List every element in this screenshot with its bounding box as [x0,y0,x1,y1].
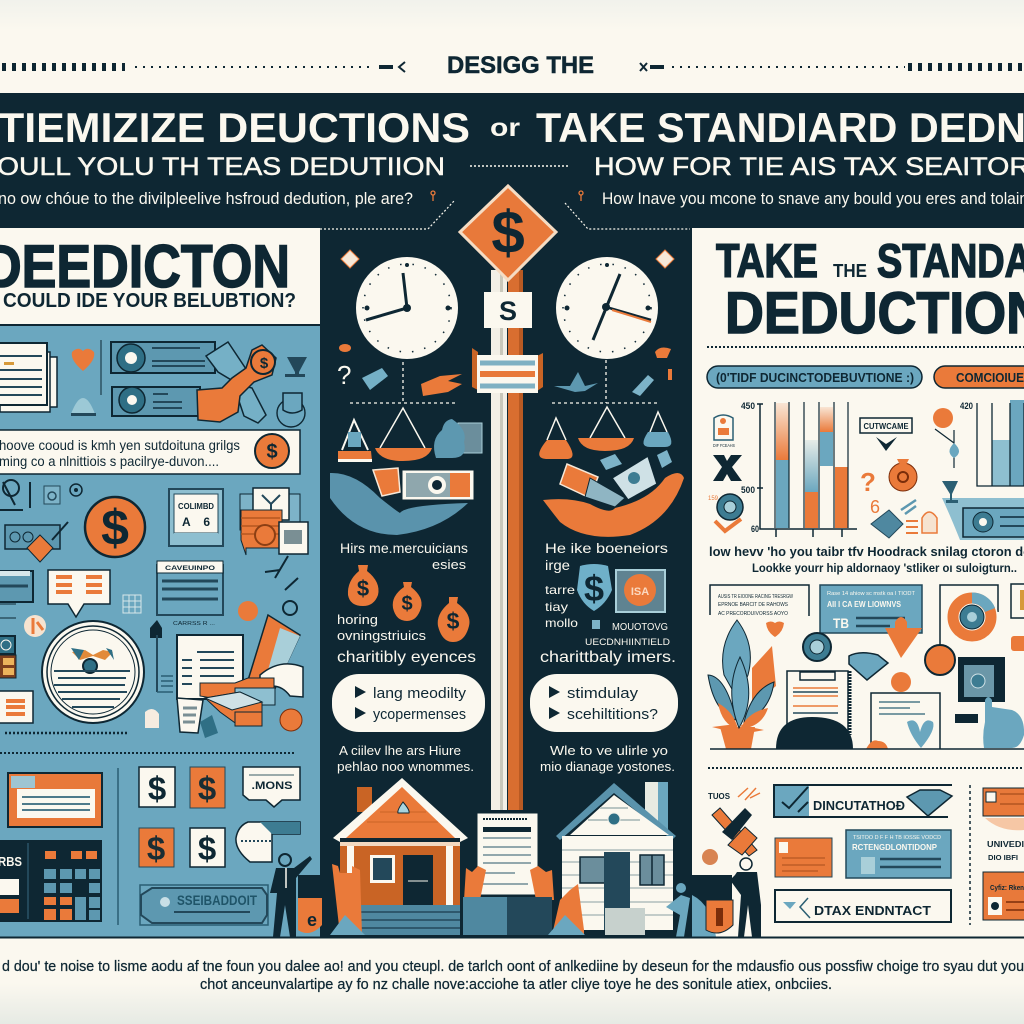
orange down arrow [885,617,922,658]
left bar chart [741,401,857,537]
note frame [710,585,809,617]
icon: large dollar coin [85,497,145,557]
right column text: tiay [545,600,568,614]
right list pill: stimdulay [567,685,639,702]
engraved badge [140,885,268,925]
right column text: charittbaly imers. [540,649,676,666]
left column text: Hirs me.mercuicians [340,540,468,556]
callout box: ming co a nlnittiois s pacilrye-duvon.... [0,453,219,469]
callout box: hoove cooud is kmh yen sutdoituna grilgs [0,437,240,453]
small caption: CARRSS R ... [173,621,216,627]
edge orange card two [983,872,1024,920]
money bags left: $ [447,608,460,634]
icon: round badge [24,615,46,637]
striped pole [491,270,523,810]
right hand with bills [543,450,684,537]
donut diagram [940,585,998,645]
small diamond left [341,250,359,268]
ISA medal square: ISA [631,586,649,598]
blue reminder card: RCTENGDLONTIDONP [852,842,937,852]
callout box [0,430,300,474]
money bags left [348,565,470,642]
edge caption [987,840,1024,862]
S label [484,292,532,328]
footer text: chot anceunvalartipe ay fo nz challe nove:acciohe ta atler cliye toye he des sonitule atiex, onbciies. [200,976,832,993]
icon: orange seal [238,601,258,621]
card row two [112,387,200,416]
blue dollar shield: $ [584,568,604,609]
dollar tile orange one: $ [198,770,216,807]
right column text [540,540,676,666]
right icon: flower branch [933,408,959,468]
icon: small house badge: DIF FCEAHS [713,443,735,448]
right panel sheet [692,228,1024,937]
speech card [243,767,300,807]
left doodles: ? [337,360,351,390]
orange note card [775,838,832,877]
left bar chart: 60 [751,524,759,534]
dotted dividers [0,733,295,753]
bottom rule [0,936,1024,938]
dollar tile cream one: $ [148,770,166,807]
header question lines [0,189,1024,229]
orange lines card [48,570,110,617]
certificate: COLIMBD [178,502,214,511]
paper and cash pile [177,615,303,738]
dashed divider [969,785,971,925]
left column text: charitibly eyences [337,649,476,666]
icon: large dollar coin: $ [101,500,129,556]
tablet with pointing hand [955,657,1024,748]
blue info card: AII I CA EW LIOWNVS [827,600,902,609]
icon cluster below callout [870,497,937,538]
tools label: TUOS [708,792,731,801]
orange pill label [934,366,1024,388]
left bar chart: 500 [741,485,755,495]
speech card: .MONS [252,780,292,792]
orange lock: e [307,910,317,930]
right panel heading: THE [833,261,867,281]
edge caption: UNIVEDI [987,840,1024,849]
left doodles [337,344,462,396]
left panel header: COULD IDE YOUR BELUBTION? [3,289,296,312]
right column text: He ike boeneiors [545,540,668,556]
left column text: horing [337,612,378,627]
S label: S [499,296,517,326]
certificate [169,489,223,546]
left column text: esies [432,557,467,572]
right panel heading: TAKE [716,234,818,287]
document stack [0,343,57,412]
checkmark card [774,785,952,817]
edge box and tag [1011,584,1024,651]
blue info card [820,585,922,633]
orange window card [8,773,102,827]
note frame: AUSIS TR EIOONE RACING TRESRGW [718,594,793,600]
right closing text: Wle to ve ulirle yo [550,743,668,758]
tools label [708,788,760,801]
orange list card [0,691,33,723]
dollar tile cream two: $ [198,830,216,867]
blue reminder card: TSITOO D F F H TB IOSSE VODCD [853,835,941,841]
left panel body [0,326,320,937]
icon: shield dome [71,340,101,416]
right panel body text [709,544,1024,575]
small card with diamond [5,522,68,562]
person presenting [270,854,312,937]
list document: CAVEUINPO [165,565,215,572]
paper held in two hands [463,813,554,935]
left column text: ovningstriuics [337,628,427,643]
edge caption: DIO IBFI [988,853,1018,862]
left closing text: A ciilev lhe ars Hiure [339,743,461,758]
icon: magnifier [0,480,30,510]
dollar tile orange two: $ [147,830,165,867]
sub title [0,153,1024,181]
right doodles [554,348,672,396]
right closing text: mio dianage yostones. [540,759,675,774]
right closing text [540,743,675,774]
right column text: MOUOTOVG [612,622,668,633]
icon cluster below callout: 6 [870,497,880,517]
small diamond right [656,250,674,268]
callout tag: CUTWCAME [864,422,909,431]
money bags left: $ [401,593,413,615]
dollar road sign [460,186,556,280]
calculator panel [0,840,102,922]
blue pill label [707,366,922,388]
right list pill: scehiltitions? [567,706,658,723]
footer text [2,958,1024,993]
right list pill [530,674,678,732]
left column text [337,540,476,666]
main title: TAKE STANDIARD DEDN [536,104,1024,151]
crossed tools [702,808,757,865]
blue swoosh card [942,481,1024,540]
note frame: AC PRECORDUIVORSS AOYO [718,611,788,617]
right column text: mollo [545,616,578,630]
blue info card: Rase 14 ahiow sc mstk oa I TIODT [827,591,916,597]
main title: TIEMIZIZE DEUCTIONS [0,104,470,151]
white house [548,782,690,937]
dollar tile orange one [190,767,225,808]
icon: spiral coin [803,633,831,661]
icon: dish [277,393,305,427]
plant [708,620,776,749]
up arrow with note [150,620,173,692]
vertical divider [117,768,119,925]
panel: central comparison [330,186,690,937]
icon: blue gem heart [849,653,888,680]
list document [157,561,223,615]
dollar tile cream two [190,828,225,867]
icon: camera and pin [44,484,82,504]
edge orange card [983,788,1024,830]
callout box: $ [266,441,278,463]
panel: standard deduction [692,228,1024,937]
left list pill [332,674,485,732]
dollar road sign: $ [491,199,525,266]
ISA medal square [616,570,665,612]
left scale and dashed links [338,362,457,462]
icon: question and money bag [860,459,917,497]
icon: mask face [145,709,159,728]
left list pill: lang meodilty [373,685,467,702]
right panel heading [716,234,1024,346]
icon: eye coin and check [708,494,743,531]
ticket [236,822,300,862]
left list pill: ycopermenses [373,706,466,723]
main title: or [490,114,520,142]
pole band [472,348,543,393]
small icon column [0,636,16,678]
contact card [775,890,951,922]
card row one [111,342,215,373]
note frame: EPRNOE BARCIT DE RAHOWS [718,602,789,608]
dotted divider [707,346,1024,348]
orange lock [298,875,322,933]
icon: orange heart [766,622,784,637]
left panel header [0,228,320,326]
left bar chart: 450 [741,401,755,411]
icon: orange token [891,672,911,692]
screen card [0,571,33,618]
left clock [356,257,458,359]
main title [0,104,1024,151]
folder collage [240,488,308,555]
right column text: tarre [545,583,575,597]
blue pill label: (0'TIDF DUCINCTODEBUVTIONE :) [716,370,914,385]
certificate: A 6 [182,515,210,529]
advisor figure and lock [692,858,761,937]
dollar tile orange two [139,828,174,867]
icon: small house badge [713,415,735,448]
dotted divider lower [708,767,1024,769]
orange house [330,778,468,935]
right clock [556,257,658,359]
icon: big X [713,455,742,481]
right column text: UECDNHIINTIELD [585,637,671,647]
sub title: HOW FOR TIE AIS TAX SEAITOR [594,153,1024,181]
sub title: OULL YOLU TH TEAS DEDUTIION [0,153,445,181]
icon: heart [72,349,94,371]
orange twisted ribbon and coin [197,342,276,423]
letter with heart [866,693,940,749]
blue info card: TB [833,615,849,631]
callout tag [860,418,912,451]
icon: sprig [265,556,298,615]
icon: trophy [285,357,307,377]
icon: orange circle [925,645,955,675]
left closing text: pehlao noo wnommes. [337,759,474,774]
left hand with bills [330,468,474,535]
icon: eye coin and check: 159 [708,496,719,502]
engraved badge: SSEIBADDOIT [177,892,257,908]
blue dollar shield [577,564,612,629]
blue reminder card [846,830,951,878]
top ornament and kicker [2,52,1024,79]
dollar tile cream one [139,767,175,807]
orange twisted ribbon and coin: $ [260,355,269,372]
right bar chart [960,400,1024,486]
left closing text [337,743,474,774]
right column text: irge [545,557,570,573]
money bags left: $ [357,576,369,601]
right bar chart: 420 [960,401,973,411]
small data block [123,595,141,613]
shelf line [710,748,1024,750]
round seal document [42,621,144,723]
checkmark card: DINCUTATHOÐ [813,798,905,813]
icon: question and money bag: ? [860,467,876,497]
panel: itemize deductions [0,228,322,937]
icon: orange stamp [280,709,302,731]
right scale and dashed links [539,360,671,459]
blue figure with frame [434,419,482,458]
right panel body text: low hevv 'ho you taibr tfv Hoodrack snilag ctoron do [709,544,1024,559]
contact card: DTAX ENDNTACT [814,903,931,918]
header question lines: no ow chóue to the divilpleelive hsfroud dedution, ple are? [0,189,413,208]
top ornament and kicker: DESIGG THE [447,52,594,79]
clipboard [776,671,853,749]
